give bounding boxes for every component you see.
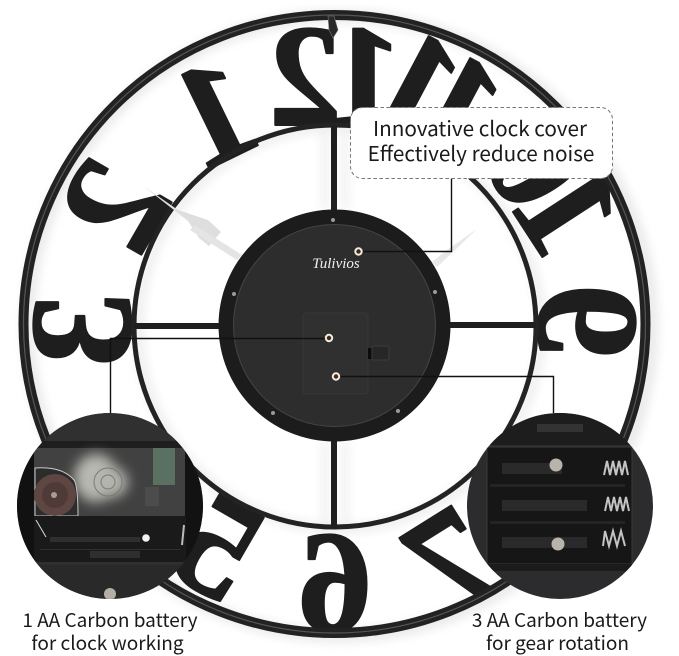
detail lens: battery box — [467, 413, 653, 599]
caption: left battery: 1 AA Carbon battery — [22, 606, 198, 633]
battery bay — [34, 516, 186, 564]
gear rings — [94, 468, 122, 496]
spokes — [134, 126, 536, 528]
callout: clock cover — [350, 108, 612, 178]
holder — [487, 447, 632, 564]
leader lines — [110, 178, 554, 414]
brand logo: Tulivios — [312, 256, 360, 272]
callout: clock cover: Innovative clock cover — [373, 112, 588, 142]
rim rivets — [232, 218, 437, 415]
caption: right battery: for gear rotation — [486, 629, 629, 656]
rivets — [550, 458, 562, 472]
movement body — [34, 448, 185, 516]
inner metal ring — [134, 125, 536, 527]
lower panel — [38, 565, 176, 599]
battery contact — [142, 534, 150, 542]
numeral 7: 7 — [378, 472, 526, 648]
springs — [603, 461, 629, 546]
callout: clock cover: Effectively reduce noise — [368, 137, 594, 167]
hanging hook — [328, 16, 338, 38]
green patch — [153, 448, 175, 485]
detail lens: clock movement — [17, 413, 205, 601]
small gear window — [145, 487, 159, 506]
numeral 9: 9 — [507, 284, 669, 358]
caption: left battery — [22, 606, 198, 656]
pale gear glare — [74, 454, 128, 502]
clock hands (white) — [142, 185, 477, 267]
numeral 11: 11 — [353, 0, 529, 194]
switch — [368, 346, 389, 360]
numeral 2: 2 — [26, 132, 202, 276]
dividers — [490, 484, 625, 524]
caption: right battery — [472, 606, 647, 656]
marker dots — [326, 248, 362, 380]
numeral 3: 3 — [0, 294, 162, 366]
numeral 10: 10 — [454, 91, 658, 284]
numeral 1: 1 — [146, 23, 282, 201]
cell markings — [502, 463, 587, 548]
caption: right battery: 3 AA Carbon battery — [472, 606, 647, 633]
brown gear — [34, 468, 78, 516]
central clock cover — [218, 210, 450, 442]
battery door — [303, 313, 368, 394]
numeral 5: 5 — [146, 457, 290, 633]
side shadow — [17, 449, 35, 569]
top band — [42, 413, 178, 443]
caption: left battery: for clock working — [31, 629, 184, 656]
